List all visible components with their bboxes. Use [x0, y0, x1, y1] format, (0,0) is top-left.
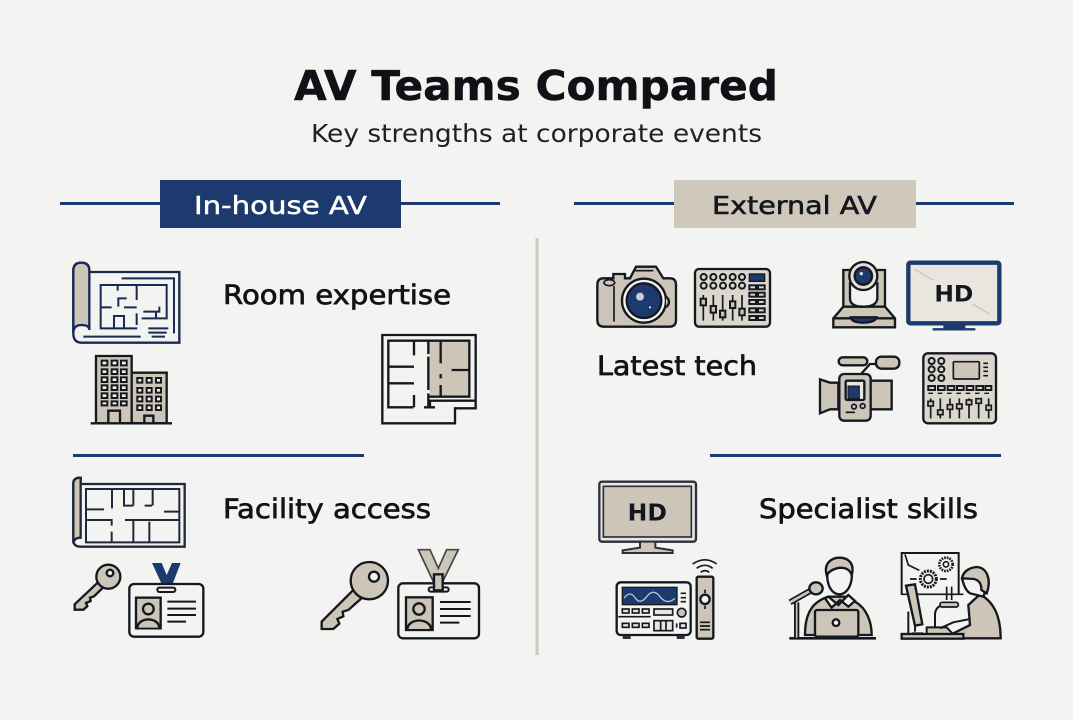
label: Facility access: Facility access: [223, 494, 431, 525]
title: AV Teams Compared: [294, 62, 778, 110]
panel: latest tech icons: [597, 262, 999, 423]
subtitle: Key strengths at corporate events: [311, 119, 762, 148]
icon: HD television: [599, 482, 696, 553]
icon: HD monitor: HD: [934, 283, 973, 308]
label: Latest tech: Latest tech: [597, 351, 757, 382]
icon: audio board: [923, 353, 996, 423]
badge: In-house AV: [160, 180, 401, 228]
icon: small ID badge with navy lanyard: [129, 563, 203, 637]
icon: office buildings: [91, 356, 172, 423]
panel: specialist skills icons: [599, 482, 1001, 639]
icon: blueprint: [73, 263, 179, 343]
icon: large key: [322, 562, 388, 629]
label: Room expertise: Room expertise: [223, 280, 451, 311]
icon: presenter with microphone: [789, 558, 876, 638]
icon: large ID badge with tan lanyard: [398, 550, 479, 638]
badge: External AV: External AV: [712, 191, 877, 220]
icon: PTZ camera: [833, 262, 895, 327]
icon: mixer console: [695, 269, 770, 327]
panel: room expertise icons: [73, 263, 476, 423]
badge: In-house AV: In-house AV: [194, 191, 367, 220]
icon: technician with gears and monitor: [902, 553, 1001, 639]
icon: audio receiver and remote: [617, 560, 717, 639]
icon: small key: [75, 565, 120, 610]
label: Specialist skills: Specialist skills: [759, 494, 978, 525]
badge: External AV: [674, 180, 916, 228]
icon: blueprint plan: [73, 478, 185, 547]
panel: facility access icons: [73, 478, 479, 638]
icon: HD television: HD: [628, 498, 667, 526]
icon: photo camera: [597, 267, 676, 327]
icon: video camera: [820, 357, 899, 421]
icon: HD monitor: [908, 263, 999, 329]
icon: floor plan: [382, 335, 476, 423]
